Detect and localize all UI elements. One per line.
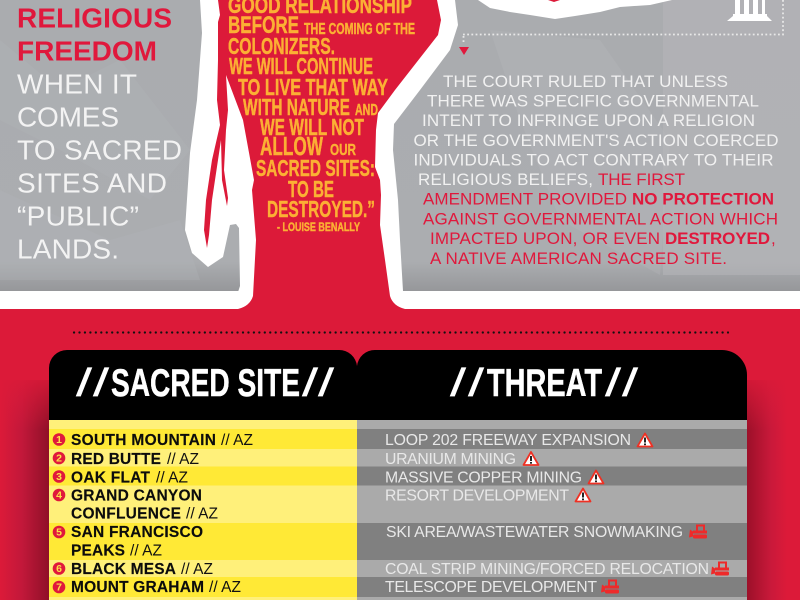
threat descriptions: URANIUM MINING (385, 451, 516, 468)
sacred site names: // AZ (209, 579, 241, 596)
court ruling text: AMENDMENT PROVIDED (423, 190, 627, 208)
white band below the panels (0, 291, 800, 309)
dotted divider (74, 331, 728, 334)
sacred site names: GRAND CANYON (71, 488, 202, 504)
quote by Louise Benally: BEFORE (228, 12, 299, 39)
table header: / (605, 362, 621, 405)
court ruling text: THERE WAS SPECIFIC GOVERNMENTAL (427, 92, 759, 110)
threat descriptions: RESORT DEVELOPMENT (385, 488, 569, 504)
right panel lighter area (663, 0, 800, 275)
court ruling text: RELIGIOUS BELIEFS, (418, 170, 593, 189)
sacred site names: MOUNT GRAHAM (71, 579, 204, 596)
table header: / (76, 362, 92, 405)
table header (49, 350, 747, 420)
white cloud at top (478, 0, 672, 19)
quote by Louise Benally (228, 0, 415, 234)
numbered badges: 1 (56, 434, 62, 446)
red lower background (0, 309, 800, 600)
sacred site names: RED BUTTE (71, 451, 161, 468)
heading: religious freedom: “PUBLIC” (17, 200, 139, 232)
numbered badges: 7 (56, 582, 62, 594)
threat column rows (357, 420, 747, 600)
sacred site names (71, 432, 253, 596)
threat descriptions: SKI AREA/WASTEWATER SNOWMAKING (386, 524, 683, 541)
court ruling text: DESTROYED (665, 229, 770, 248)
court ruling text (414, 72, 778, 268)
quote by Louise Benally: WITH NATURE (243, 94, 350, 120)
court ruling text: , (771, 229, 776, 248)
court ruling text: INTENT TO INFRINGE UPON A RELIGION (422, 111, 755, 130)
numbered badges: 6 (56, 563, 62, 575)
threat descriptions: TELESCOPE DEVELOPMENT (385, 579, 597, 596)
court ruling text: NO PROTECTION (632, 190, 774, 208)
quote by Louise Benally: WE WILL NOT (260, 114, 364, 140)
sacred site names: // AZ (186, 506, 218, 522)
sacred site names: SAN FRANCISCO (71, 524, 203, 541)
numbered badges: 5 (56, 527, 62, 539)
court ruling text: A NATIVE AMERICAN SACRED SITE. (430, 249, 727, 268)
numbered badges: 3 (56, 471, 62, 483)
table header: / (318, 362, 334, 405)
heading: religious freedom: LANDS. (17, 234, 119, 264)
cloud red accent (548, 0, 560, 2)
quote by Louise Benally: COLONIZERS. (228, 33, 335, 59)
grey upper panel (0, 0, 800, 291)
court ruling text: THE FIRST (598, 170, 685, 189)
numbered badges (53, 433, 65, 594)
heading: religious freedom: COMES (17, 102, 119, 132)
court ruling text: THE COURT RULED THAT UNLESS (443, 72, 728, 91)
site column rows (49, 420, 357, 600)
table header: THREAT (487, 362, 602, 405)
quote by Louise Benally: WE WILL CONTINUE (229, 53, 373, 79)
threat descriptions: COAL STRIP MINING/FORCED RELOCATION (385, 561, 709, 578)
warning icons (524, 434, 652, 502)
numbered badges: 2 (56, 453, 62, 465)
table header: / (93, 362, 109, 405)
table header: / (450, 362, 466, 405)
heading: religious freedom: TO SACRED (17, 134, 182, 166)
quote by Louise Benally: ALLOW (260, 133, 324, 161)
sacred site names: OAK FLAT (71, 470, 151, 486)
threat descriptions: MASSIVE COPPER MINING (385, 470, 582, 486)
threat descriptions: LOOP 202 FREEWAY EXPANSION (385, 432, 631, 449)
dotted connector arrow (459, 0, 783, 55)
heading: religious freedom: WHEN IT (17, 68, 137, 100)
heading: religious freedom: RELIGIOUS (17, 2, 172, 34)
numbered badges: 4 (56, 490, 62, 502)
quote by Louise Benally: - LOUISE BENALLY (277, 220, 360, 234)
white figure outline (185, 0, 458, 309)
table header: / (622, 362, 638, 405)
table header: / (468, 362, 484, 405)
court ruling text: AGAINST GOVERNMENTAL ACTION WHICH (423, 210, 778, 228)
quote by Louise Benally: DESTROYED.” (267, 196, 375, 222)
sacred site names: // AZ (130, 543, 162, 560)
sacred site names: // AZ (167, 451, 199, 468)
sacred site names: CONFLUENCE (71, 506, 181, 522)
quote by Louise Benally: TO LIVE THAT WAY (238, 74, 388, 100)
red figure silhouette (204, 0, 441, 309)
quote by Louise Benally: OUR (330, 142, 356, 159)
table header: SACRED SITE (111, 362, 300, 405)
threat descriptions (385, 432, 709, 596)
court ruling text: INDIVIDUALS TO ACT CONTRARY TO THEIR (414, 150, 774, 170)
sacred site names: // AZ (181, 561, 213, 578)
icon: courthouse columns (727, 0, 772, 21)
heading: religious freedom: SITES AND (17, 168, 167, 198)
quote by Louise Benally: AND (355, 102, 378, 119)
sacred site names: SOUTH MOUNTAIN (71, 432, 216, 449)
bulldozer icons (601, 524, 729, 594)
table: sacred sites and threats (49, 350, 747, 600)
sacred site names: // AZ (221, 432, 253, 449)
heading: religious freedom (17, 2, 182, 264)
court ruling text: IMPACTED UPON, OR EVEN (430, 229, 660, 248)
quote by Louise Benally: THE COMING OF THE (304, 21, 415, 38)
court ruling text: OR THE GOVERNMENT'S ACTION COERCED (414, 131, 778, 150)
table header: / (302, 362, 318, 405)
quote by Louise Benally: SACRED SITES: (256, 155, 375, 181)
quote by Louise Benally: TO BE (288, 176, 334, 202)
heading: religious freedom: FREEDOM (17, 36, 157, 66)
sacred site names: BLACK MESA (71, 561, 176, 578)
sacred site names: // AZ (156, 470, 188, 486)
sacred site names: PEAKS (71, 543, 125, 560)
